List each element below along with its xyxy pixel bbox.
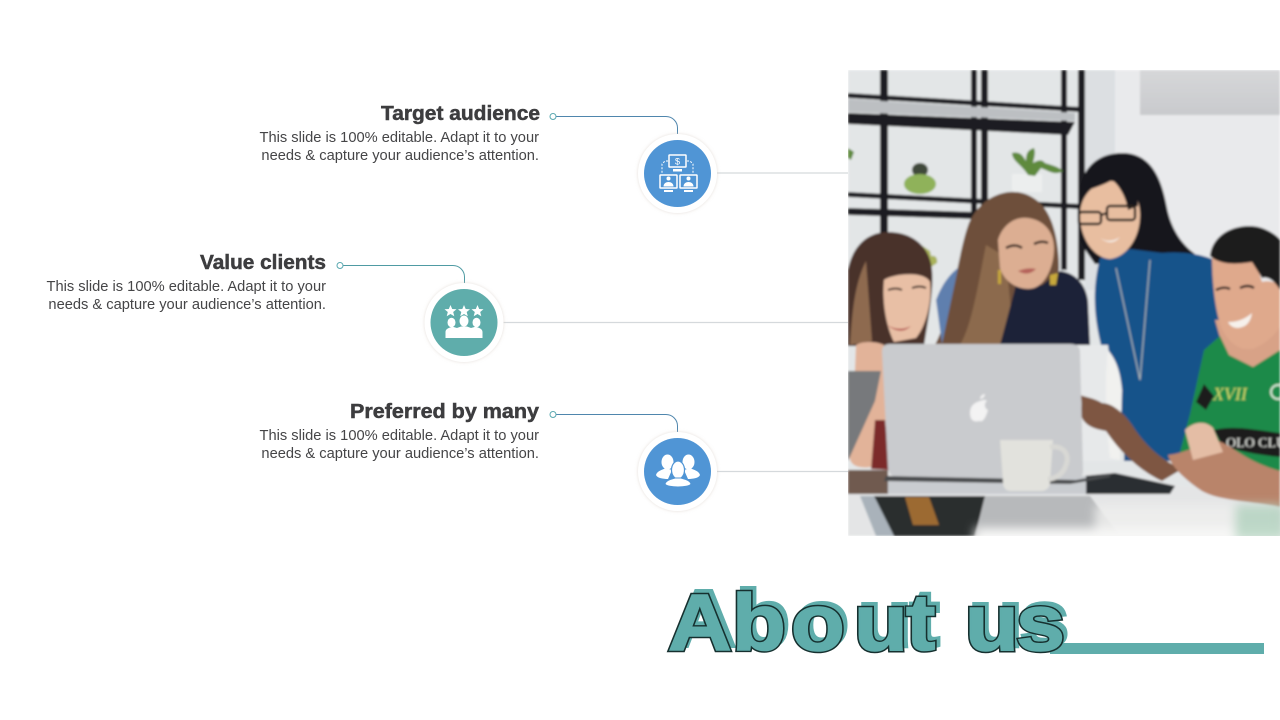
description: preferred by many: This slide is 100% editable. Adapt it to your <box>260 428 539 444</box>
photo: team around a laptop <box>848 70 1280 548</box>
description: target audience: needs & capture your audience’s attention. <box>261 148 539 164</box>
icon: networked monitors: $ <box>675 156 680 166</box>
description: value clients: needs & capture your audience’s attention. <box>48 297 326 313</box>
title fill text: About us <box>668 578 1065 667</box>
heading: target audience: Target audience <box>381 103 540 125</box>
man: hair, face <box>1210 256 1280 322</box>
photo bottom fade <box>967 498 1280 536</box>
icon: rated clients <box>424 283 504 362</box>
wall and column <box>1140 70 1280 116</box>
apple logo <box>970 394 988 421</box>
woman left <box>848 232 932 346</box>
laptop <box>882 344 1083 478</box>
title outline text: About us <box>668 578 1065 667</box>
connector lines from icons to photo <box>503 173 848 472</box>
title shadow text: About us <box>672 574 1069 663</box>
heading: preferred by many: Preferred by many <box>350 401 540 423</box>
description: value clients: This slide is 100% editable. Adapt it to your <box>47 279 326 295</box>
woman center: hair and body <box>935 192 1059 349</box>
woman right: dress <box>1093 248 1221 463</box>
dot: preferred by many <box>550 412 556 418</box>
man: neck <box>1215 320 1280 369</box>
heading: value clients: Value clients <box>200 252 326 274</box>
title: About us <box>668 574 1264 667</box>
connector: preferred by many <box>556 414 678 433</box>
dot: value clients <box>337 262 343 268</box>
icon: group of people <box>638 432 717 511</box>
icon: networked monitors <box>638 134 717 213</box>
grey laptop left <box>848 371 881 461</box>
plants <box>848 148 1063 267</box>
table surface <box>870 467 888 472</box>
man: polo shirt <box>1179 336 1280 472</box>
photo: team around a laptop: XVII <box>1212 384 1248 404</box>
connector: value clients <box>343 266 464 284</box>
item: value clients <box>47 252 504 362</box>
dark underside of table <box>870 496 995 536</box>
shelf unit <box>848 70 1085 280</box>
woman right: hair back <box>1078 153 1195 264</box>
description: target audience: This slide is 100% editable. Adapt it to your <box>260 130 539 146</box>
coffee cup <box>1000 440 1053 491</box>
title underline bar <box>1050 643 1264 654</box>
woman right: face <box>1080 181 1140 259</box>
white chair and gap <box>1100 342 1111 366</box>
shelf light board <box>848 99 1075 121</box>
man: arms and hands <box>1080 395 1182 481</box>
item: preferred by many <box>260 401 717 511</box>
dot: target audience <box>550 114 556 120</box>
connector: target audience <box>556 116 678 135</box>
description: preferred by many: needs & capture your audience’s attention. <box>261 446 539 462</box>
item: target audience <box>260 103 717 213</box>
